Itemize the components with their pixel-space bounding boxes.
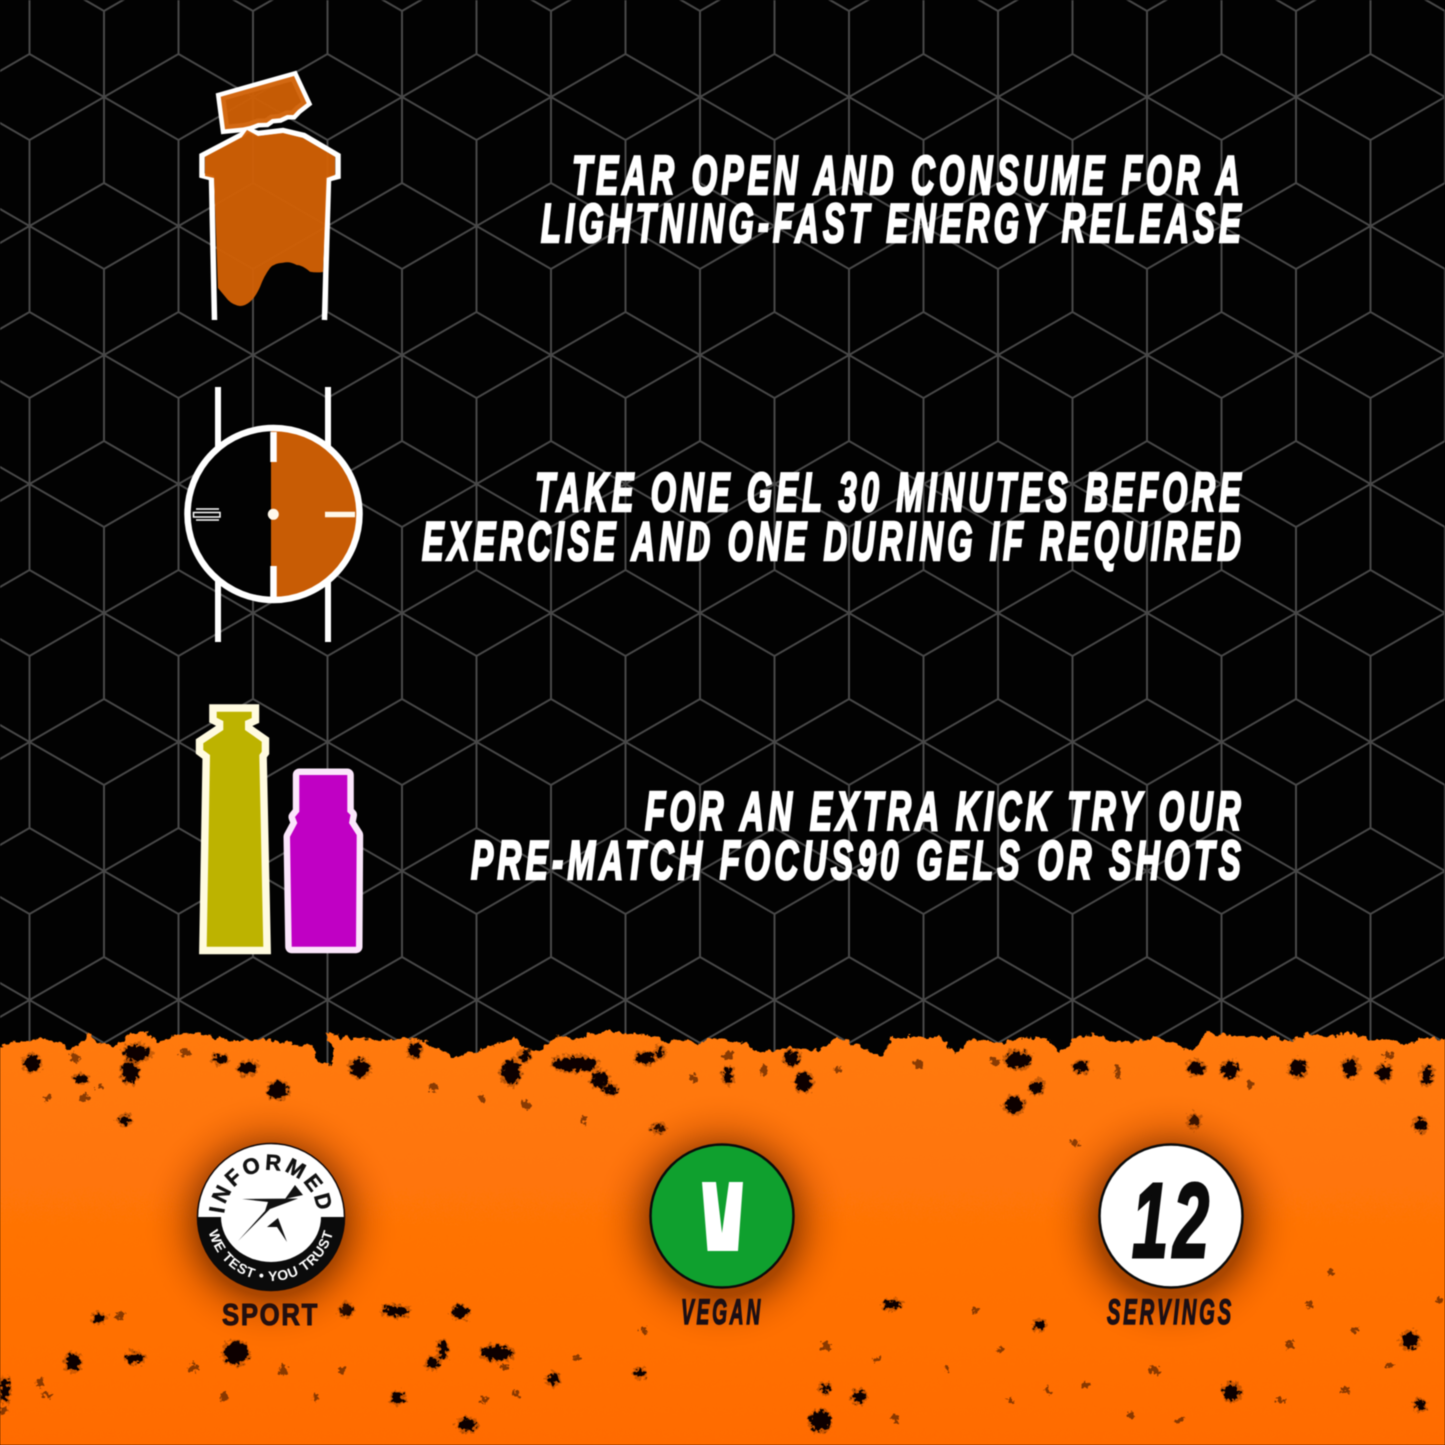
label: SERVINGS: SERVINGS (1107, 1293, 1234, 1332)
heading: tear open instruction (541, 145, 1245, 254)
icon: watch showing 30 minutes (188, 387, 360, 642)
arc text: INFORMED (224, 1170, 318, 1217)
badge: 12 servings (1100, 1144, 1242, 1288)
icon: yellow gel and purple shot (203, 712, 357, 947)
yellow gel (203, 712, 263, 947)
purple shot (290, 775, 357, 947)
arc text: we test you trust (207, 1217, 335, 1281)
heading: timing instruction (422, 462, 1245, 572)
label: VEGAN: VEGAN (681, 1293, 763, 1332)
logo: runner mark (238, 1185, 303, 1242)
icon: torn open gel (202, 76, 338, 320)
label: SPORT: SPORT (222, 1297, 319, 1332)
grunge specks: large (1, 1043, 1432, 1431)
grunge specks: small (0, 1049, 1443, 1424)
heading: extra kick instruction (471, 781, 1245, 891)
panel: orange grunge band (0, 1032, 1445, 1445)
badge: Informed Sport: WE TEST • YOU TRUST (208, 1228, 333, 1282)
badge: Informed Sport: INFORMED (208, 1154, 332, 1214)
badge shadows (143, 1094, 1299, 1350)
badge: Informed Sport (196, 1142, 346, 1292)
badge: 12 servings: 12 (1132, 1162, 1214, 1280)
badge: vegan (650, 1144, 794, 1288)
